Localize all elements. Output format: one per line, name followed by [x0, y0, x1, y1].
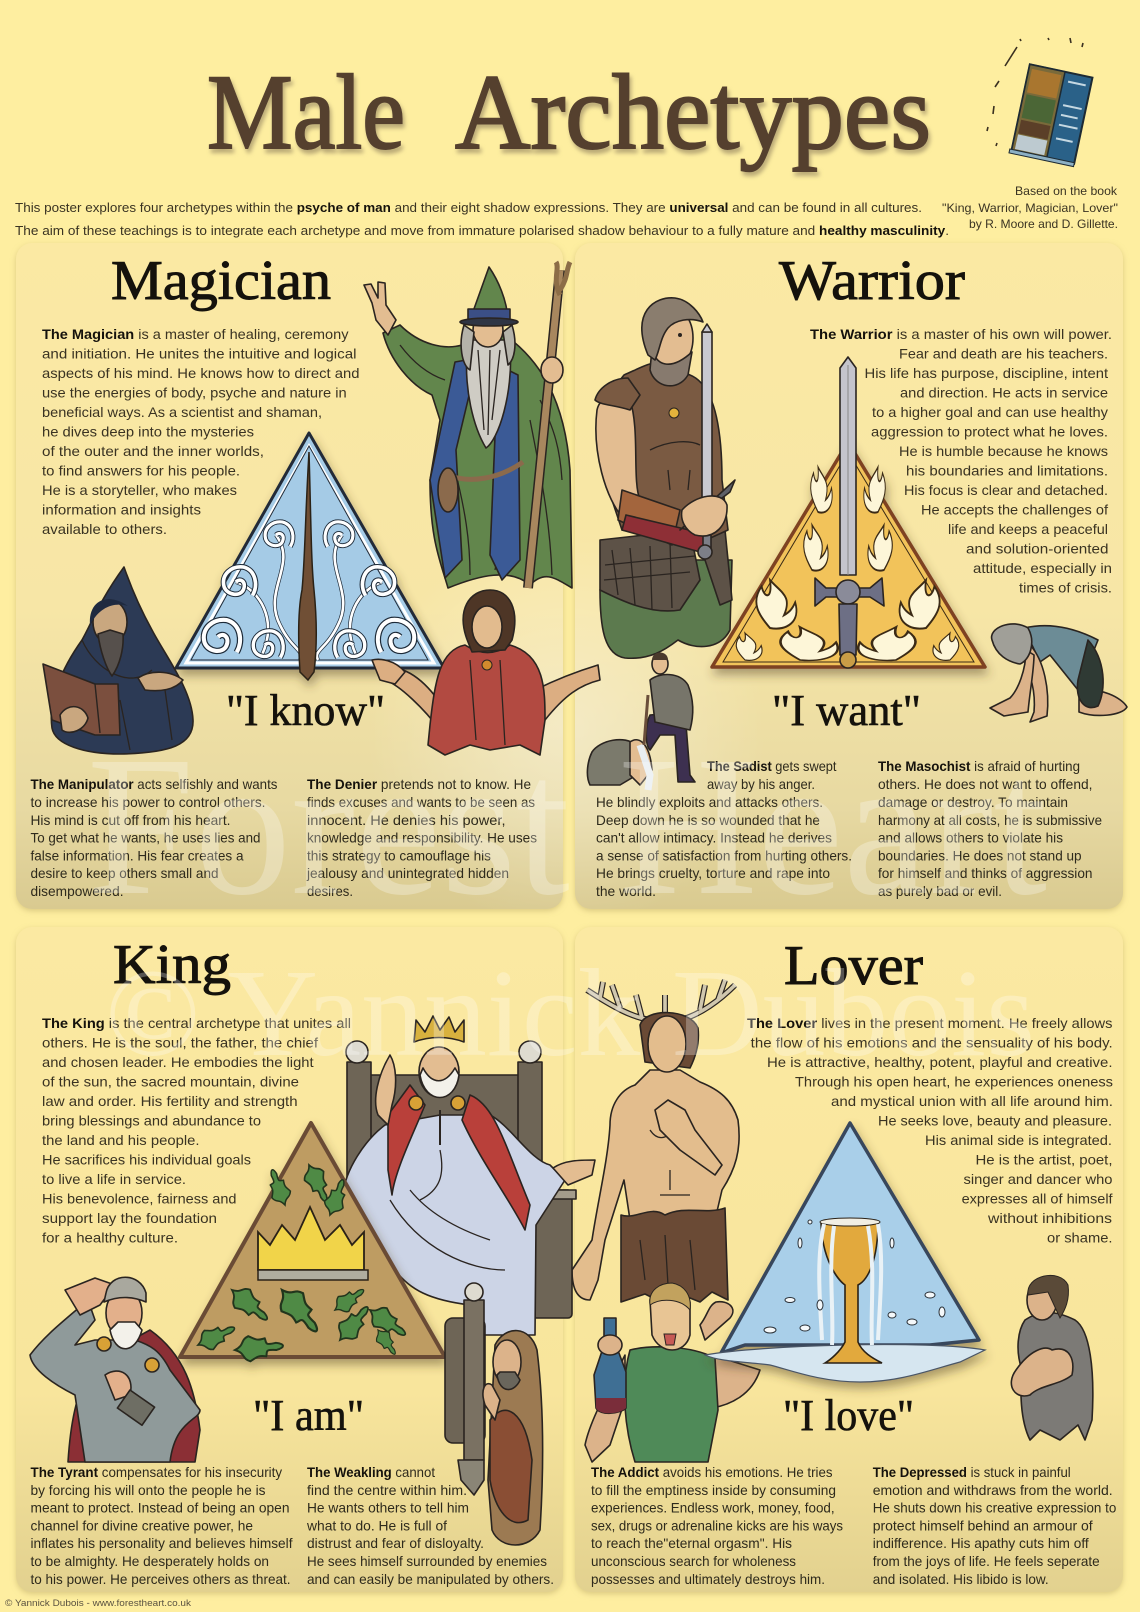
text: King description: to live a life in service. [42, 1171, 186, 1187]
text: The Masochist: damage or destroy. To maintain [878, 794, 1068, 810]
text: Warrior description: He is humble because he knows [899, 443, 1108, 459]
text: The Depressed: indifference. His apathy cuts him off [873, 1535, 1089, 1551]
text: The Sadist: The Sadist gets swept [707, 758, 837, 774]
text: The Masochist [878, 758, 1102, 899]
book credit [942, 184, 1118, 231]
text: Magician description: He is a storyteller, who makes [42, 482, 237, 498]
text: The Masochist: as purely bad or evil. [878, 883, 1002, 899]
text: Lover description: the flow of his emotions and the sensuality of his body. [751, 1034, 1113, 1050]
text: Lover description: He is the artist, poet, [976, 1152, 1112, 1168]
text: The Sadist: can't allow intimacy. Instead he derives [596, 830, 832, 846]
heading: King: King [113, 934, 231, 996]
text: Warrior description [810, 326, 1112, 596]
triangle: Magician air symbol [176, 433, 444, 680]
text: Warrior description: and solution-oriented [966, 540, 1108, 556]
text: The Depressed: and isolated. His libido is low. [873, 1571, 1049, 1587]
intro text: The aim of these teachings is to integrate each archetype and move from immature polarised shadow behaviour to a fully mature and healthy masculinity . [15, 223, 949, 238]
text: The Addict: possesses and ultimately destroys him. [591, 1571, 825, 1587]
text: The Sadist: away by his anger. [707, 776, 815, 792]
panel: Magician [16, 243, 600, 909]
text: Lover description: or shame. [1047, 1230, 1112, 1246]
title [207, 54, 931, 172]
triangle: King earth symbol [180, 1123, 445, 1363]
text: The Masochist: harmony at all costs, he is submissive [878, 812, 1102, 828]
figure: Tyrant [30, 1277, 200, 1462]
text: The Manipulator: disempowered. [30, 883, 124, 899]
text: Warrior description: life and keeps a peaceful [948, 521, 1108, 537]
text: The Addict: experiences. Endless work, money, food, [591, 1500, 835, 1516]
text: The Depressed: He shuts down his creative expression to [873, 1500, 1116, 1516]
text: The Weakling: distrust and fear of disloyalty. [307, 1535, 484, 1551]
text: Magician description: and initiation. He unites the intuitive and logical [42, 346, 356, 362]
text: The Masochist: and allows others to violate his [878, 830, 1063, 846]
text: King description: of the sun, the sacred mountain, divine [42, 1074, 299, 1090]
quote: I am: "I am" [253, 1391, 364, 1440]
icon: Warrior sword [815, 357, 884, 668]
text: Lover description: He is attractive, healthy, potent, playful and creative. [767, 1054, 1112, 1070]
watermark: copyright Yannick Dubois: © Yannick Dubois [105, 945, 1035, 1083]
text: The Depressed: from the joys of life. He feels seperate [873, 1553, 1100, 1569]
watermark: Forest Heart: Forest Heart [87, 716, 1047, 937]
figure: King on throne [343, 1016, 595, 1335]
figure: Denier red robed man [372, 590, 600, 755]
text: The Tyrant [30, 1464, 293, 1587]
figure: Lover antlered man [572, 980, 739, 1304]
text: The Denier: knowledge and responsibility. He uses [307, 830, 537, 846]
text: The Masochist: others. He does not want to offend, [878, 776, 1092, 792]
figure: Weakling [445, 1283, 543, 1545]
text: The Depressed: protect himself behind an armour of [873, 1518, 1093, 1534]
triangle: Warrior fire symbol [712, 442, 985, 667]
text: The Tyrant: meant to protect. Instead of being an open [30, 1500, 290, 1516]
text: The Masochist: for himself and thinks of aggression [878, 865, 1092, 881]
text: Lover description: Through his open heart, he experiences oneness [795, 1074, 1113, 1090]
text: King description: support lay the foundation [42, 1210, 217, 1226]
text: The Denier [306, 776, 537, 899]
text: The Weakling: and can easily be manipulated by others. [307, 1571, 554, 1587]
text: The Weakling [306, 1464, 554, 1587]
text: Lover description: The Lover lives in the present moment. He freely allows [747, 1015, 1112, 1031]
text: King description: law and order. His fertility and strength [42, 1093, 298, 1109]
book credit: Based on the book [1015, 184, 1118, 198]
text: The Tyrant: to his power. He perceives others as threat. [30, 1571, 290, 1587]
text: Lover description [747, 1015, 1113, 1246]
quote: I love: "I love" [783, 1391, 914, 1440]
text: The Tyrant: channel for divine creative power, he [30, 1518, 253, 1534]
text: King description [42, 1015, 351, 1246]
text: The Addict: to fill the emptiness inside by consuming [591, 1482, 836, 1498]
text: The Tyrant: The Tyrant compensates for his insecurity [30, 1464, 282, 1480]
text: The Denier: finds excuses and wants to be seen as [307, 794, 535, 810]
text: The Weakling: what to do. He is full of [306, 1518, 447, 1534]
panel: Warrior [575, 243, 1127, 909]
book credit: "King, Warrior, Magician, Lover" [942, 201, 1118, 215]
text: Lover description: His animal side is integrated. [925, 1132, 1112, 1148]
heading: Warrior: Warrior [779, 250, 965, 312]
text: The Sadist: Deep down he is so wounded that he [596, 812, 820, 828]
text: Warrior description: The Warrior is a master of his own will power. [810, 326, 1112, 342]
text: Magician description: use the energies of body, psyche and nature in [42, 384, 347, 400]
text: The Tyrant: inflates his personality and believes himself [30, 1535, 293, 1551]
intro text: This poster explores four archetypes within the psyche of man and their eight shadow expressions. They are universal and can be found in all cultures. [15, 200, 922, 215]
text: King description: for a healthy culture. [42, 1230, 178, 1246]
text: The Masochist: boundaries. He does not stand up [878, 848, 1082, 864]
text: Warrior description: his boundaries and limitations. [906, 462, 1108, 478]
text: The Manipulator: false information. His fear creates a [30, 848, 244, 864]
text: Magician description: beneficial ways. As a scientist and shaman, [42, 404, 322, 420]
text: Magician description: The Magician is a master of healing, ceremony [42, 326, 348, 342]
text: Lover description: He seeks love, beauty and pleasure. [878, 1112, 1112, 1128]
icon: book [1009, 64, 1092, 167]
text: The Denier: desires. [307, 883, 353, 899]
text: The Sadist [596, 758, 852, 899]
text: The Tyrant: to be almighty. He desperately holds on [30, 1553, 269, 1569]
text: The Denier: jealousy and unintegrated hidden [306, 865, 509, 881]
text: The Depressed: The Depressed is stuck in painful [873, 1464, 1071, 1480]
text: The Denier: innocent. He denies his power, [307, 812, 506, 828]
triangle: Lover water symbol [705, 1123, 985, 1382]
title: Archetypes [455, 54, 931, 172]
text: The Depressed [873, 1464, 1116, 1587]
figure: Depressed [1011, 1275, 1093, 1440]
text: Warrior description: His life has purpose, discipline, intent [864, 365, 1108, 381]
text: King description: He sacrifices his individual goals [42, 1152, 251, 1168]
quote: I want: "I want" [772, 686, 921, 735]
figure: Warrior man with sword [595, 298, 735, 658]
text: The Weakling: find the centre within him. [307, 1482, 467, 1498]
text: King description: and chosen leader. He embodies the light [42, 1054, 314, 1070]
text: The Addict: to reach the"eternal orgasm". His [591, 1535, 792, 1551]
book credit: by R. Moore and D. Gillette. [969, 217, 1118, 231]
text: King description: The King is the central archetype that unites all [42, 1015, 351, 1031]
text: Lover description: singer and dancer who [964, 1171, 1113, 1187]
icon: book rays [987, 38, 1083, 146]
text: Magician description: aspects of his mind. He knows how to direct and [42, 365, 360, 381]
text: Lover description: without inhibitions [987, 1210, 1112, 1226]
text: King description: bring blessings and abundance to [42, 1112, 261, 1128]
text: The Denier: this strategy to camouflage his [307, 848, 491, 864]
text: The Addict [591, 1464, 843, 1587]
text: Magician description: information and insights [42, 502, 201, 518]
text: Magician description: of the outer and the inner worlds, [42, 443, 264, 459]
text: Warrior description: times of crisis. [1019, 580, 1112, 596]
text: The Manipulator: The Manipulator acts selfishly and wants [30, 776, 278, 792]
text: King description: others. He is the soul, the father, the chief [42, 1034, 318, 1050]
text: The Manipulator: desire to keep others small and [30, 865, 218, 881]
text: Warrior description: and direction. He acts in service [900, 384, 1108, 400]
text: The Sadist: He blindly exploits and attacks others. [596, 794, 823, 810]
figure: Manipulator hooded man [43, 567, 193, 754]
figure: Sadist and victim [587, 652, 695, 790]
text: The Weakling: The Weakling cannot [307, 1464, 435, 1480]
text: The Weakling: He sees himself surrounded by enemies [307, 1553, 547, 1569]
intro text [15, 200, 949, 238]
text: Warrior description: to a higher goal and can use healthy [872, 404, 1108, 420]
text: Warrior description: attitude, especially in [973, 560, 1112, 576]
heading: Lover: Lover [784, 935, 923, 997]
title: Male [207, 54, 405, 172]
text: The Manipulator: to increase his power to control others. [30, 794, 266, 810]
text: King description: the land and his people. [42, 1132, 200, 1148]
text: The Sadist: the world. [596, 883, 656, 899]
text: Warrior description: Fear and death are his teachers. [899, 346, 1108, 362]
text: The Sadist: a sense of satisfaction from hurting others. [596, 848, 852, 864]
text: The Addict: unconscious search for wholeness [591, 1553, 796, 1569]
heading: Magician: Magician [111, 250, 331, 312]
text: The Weakling: He wants others to tell him [307, 1500, 469, 1516]
text: Warrior description: His focus is clear and detached. [904, 482, 1108, 498]
quote: I know: "I know" [226, 686, 385, 735]
panel: Lover [572, 927, 1123, 1592]
text: The Addict: The Addict avoids his emotions. He tries [591, 1464, 832, 1480]
text: Magician description [42, 326, 360, 537]
text: Lover description: and mystical union with all life around him. [831, 1093, 1113, 1109]
text: The Manipulator: His mind is cut off from his heart. [30, 812, 230, 828]
panel: King [16, 927, 595, 1592]
text: Lover description: expresses all of himself [962, 1190, 1113, 1206]
figure: Magician wizard [364, 262, 572, 588]
text: Magician description: he dives deep into the mysteries [42, 424, 254, 440]
text: The Denier: The Denier pretends not to know. He [307, 776, 531, 792]
text: The Masochist: The Masochist is afraid of hurting [878, 758, 1080, 774]
text: The Sadist: He brings cruelty, torture and rape into [596, 865, 830, 881]
text: The Manipulator: To get what he wants, he uses lies and [30, 830, 260, 846]
figure: Masochist crawling man [990, 624, 1127, 722]
text: King description: His benevolence, fairness and [42, 1190, 236, 1206]
text: Magician description: to find answers for his people. [42, 462, 240, 478]
text: The Depressed: emotion and withdraws from the world. [873, 1482, 1113, 1498]
figure: Addict [585, 1283, 760, 1462]
text: Warrior description: He accepts the challenges of [921, 502, 1108, 518]
text: The Manipulator [30, 776, 278, 899]
text: The Addict: sex, drugs or adrenaline kicks are his ways [591, 1518, 843, 1534]
footer credit: © Yannick Dubois - www.forestheart.co.uk [5, 1598, 191, 1609]
text: Warrior description: aggression to protect what he loves. [871, 424, 1108, 440]
text: The Tyrant: by forcing his will onto the people he is [30, 1482, 266, 1498]
text: Magician description: available to others. [42, 521, 167, 537]
